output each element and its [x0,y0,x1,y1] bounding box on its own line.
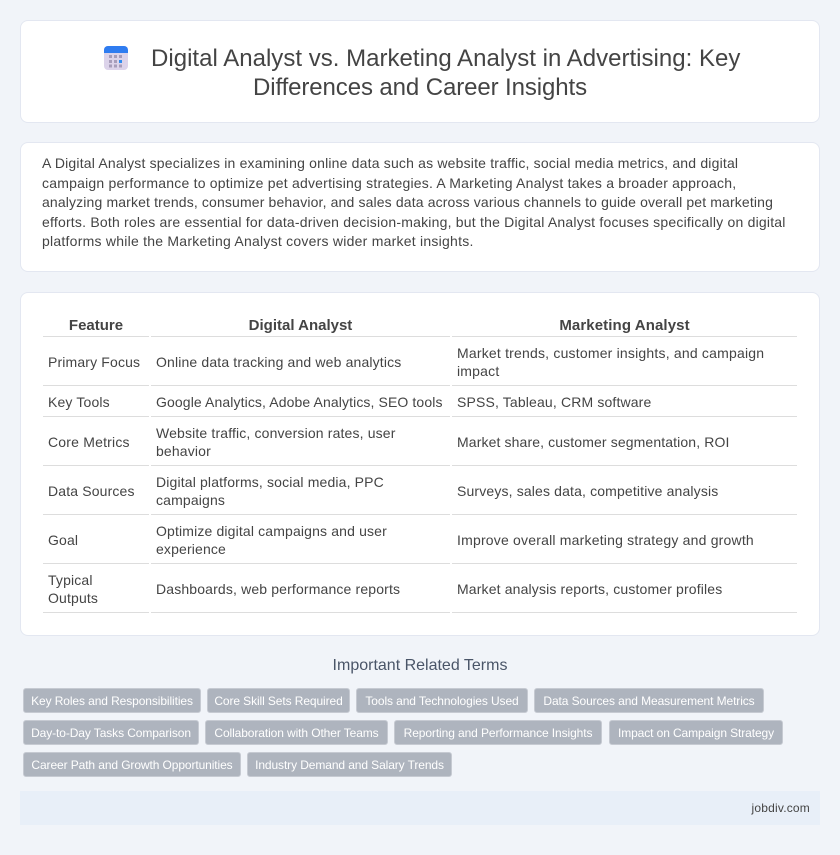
tag: Impact on Campaign Strategy [618,726,774,740]
description text: platforms while the Marketing Analyst covers wider market insights. [42,233,474,249]
tag: Core Skill Sets Required [214,694,343,708]
description text: campaign performance to optimize pet advertising strategies. A Marketing Analyst takes a broader approach, [42,175,736,191]
tag [205,720,388,745]
core metrics: marketing: Market share, customer segmentation, ROI [457,434,729,450]
tag: Data Sources and Measurement Metrics [543,694,755,708]
data sources: marketing: Surveys, sales data, competitive analysis [457,483,718,499]
typical outputs: digital: Dashboards, web performance reports [156,581,400,597]
tag [394,720,602,745]
row: goal: Goal [48,532,78,548]
tag [534,688,764,713]
row: core metrics: Core Metrics [48,434,130,450]
tag: Industry Demand and Salary Trends [255,758,444,772]
primary focus: digital: Online data tracking and web analytics [156,354,401,370]
data sources: digital: campaigns [156,492,225,508]
row: primary focus: Primary Focus [48,354,140,370]
primary focus: marketing [457,345,764,379]
data sources: digital [156,474,384,508]
primary focus: marketing: impact [457,363,499,379]
data sources: digital: Digital platforms, social media, PPC [156,474,384,490]
tag: Collaboration with Other Teams [214,726,379,740]
footer source: jobdiv.com [752,801,810,815]
panel: comparison table [20,292,820,636]
core metrics: digital: behavior [156,443,211,459]
goal: digital: experience [156,541,226,557]
related term tags [23,688,783,777]
typical outputs: marketing: Market analysis reports, customer profiles [457,581,722,597]
tag [23,720,199,745]
table header: feature: Feature [69,317,123,334]
primary focus: marketing: Market trends, customer insights, and campaign [457,345,764,361]
key tools: digital: Google Analytics, Adobe Analytics, SEO tools [156,394,443,410]
tag: Tools and Technologies Used [365,694,519,708]
goal: digital: Optimize digital campaigns and user [156,523,387,539]
description text [42,155,786,249]
core metrics: digital: Website traffic, conversion rates, user [156,425,396,441]
tag [23,752,241,777]
tag: Reporting and Performance Insights [404,726,592,740]
panel: description [20,142,820,272]
tag [247,752,452,777]
tag: Day-to-Day Tasks Comparison [31,726,191,740]
tag [23,688,201,713]
goal: marketing: Improve overall marketing strategy and growth [457,532,754,548]
description text: analyzing market trends, consumer behavior, and sales data across various channels to guide overall pet marketing [42,194,773,210]
description text: A Digital Analyst specializes in examining online data such as website traffic, social media metrics, and digital [42,155,738,171]
tag: Career Path and Growth Opportunities [31,758,233,772]
title: Digital Analyst vs. Marketing Analyst in Advertising: Key [151,45,740,72]
heading: important related terms: Important Related Terms [333,657,507,674]
title card [20,20,820,123]
table header: marketing analyst: Marketing Analyst [559,317,690,334]
row: data sources: Data Sources [48,483,135,499]
core metrics: digital [156,425,396,459]
tag [356,688,528,713]
row: typical outputs [48,572,98,606]
tag: Key Roles and Responsibilities [31,694,193,708]
tag [207,688,350,713]
key tools: marketing: SPSS, Tableau, CRM software [457,394,651,410]
row: typical outputs: Outputs [48,590,98,606]
row: typical outputs: Typical [48,572,93,588]
icon: calendar [104,46,128,70]
description text: efforts. Both roles are essential for data-driven decision-making, but the Digital Analyst focuses specifically on digital [42,214,786,230]
table header: digital analyst: Digital Analyst [249,317,352,334]
tag [609,720,783,745]
title [151,45,740,101]
row: key tools: Key Tools [48,394,110,410]
footer [20,791,820,825]
title: Differences and Career Insights [253,74,587,101]
goal: digital [156,523,387,557]
